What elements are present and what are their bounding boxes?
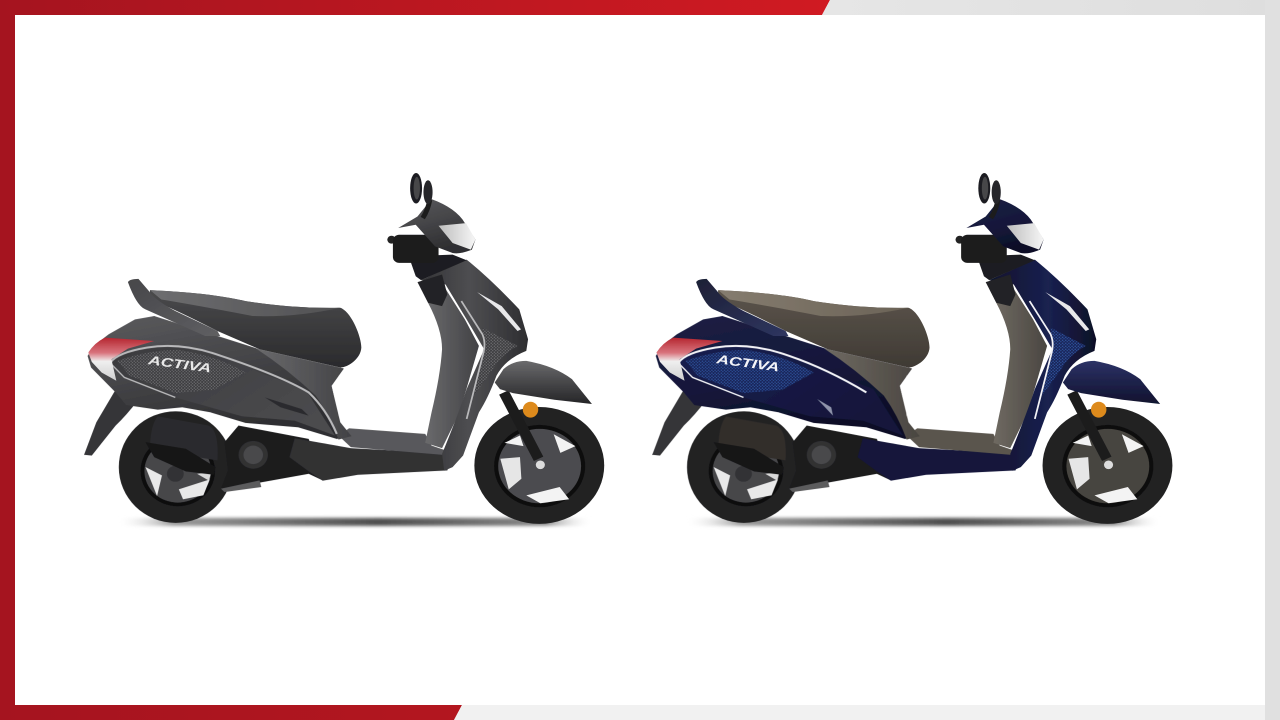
centre tunnel [256,349,352,440]
front fender [1063,361,1160,404]
shield dotted decal [474,328,518,396]
steering column [977,255,1035,280]
air filter box [150,416,218,460]
rear body panel [656,316,919,439]
shield dotted decal [1042,328,1086,396]
headlight cowl [966,199,1044,253]
floorboard [339,428,451,455]
key lock panel [986,275,1016,306]
frame: top red bar [0,0,830,15]
front fork [1072,392,1107,459]
white stripes on panel [679,346,866,397]
frame: bottom red bar [0,705,462,720]
air vent slot [817,399,833,416]
dotted decal texture [117,350,245,393]
exhaust arm [714,442,784,475]
seat [718,290,930,368]
front wheel [1043,407,1172,524]
centre tunnel [824,349,920,440]
underbody [289,438,453,481]
main stand and footrest [789,480,829,492]
leg shield inner [425,286,479,448]
air vent slot [265,397,309,416]
rear wheel [119,411,233,523]
shield light vent [1045,292,1089,331]
scooter: deep blue, right [652,173,1172,526]
air filter box [718,416,786,460]
main stand and footrest [221,480,261,492]
underbody [858,438,1021,481]
decal panel [679,345,903,436]
front fender [495,361,592,404]
tail lamp [88,338,154,381]
floorboard [907,428,1019,455]
exhaust arm [145,442,216,475]
grab rail [128,279,220,336]
model badge text: ACTIVA [714,351,780,374]
ground shadow [684,518,1161,526]
rear mudguard [652,391,707,455]
steering column [409,255,467,280]
frame: right grey bar [1265,0,1280,720]
leg shield inner [993,286,1047,448]
rear view mirrors [978,173,1001,218]
frame: top grey bar [822,0,1280,15]
grab rail [696,279,788,336]
headlight [439,223,475,250]
decal panel [110,345,335,436]
handlebar controls [387,235,439,263]
engine and pulley [789,426,891,489]
amber reflector [1091,402,1106,418]
leg shield front [989,260,1096,471]
scooter: matte grey, left [84,173,604,526]
dotted decal texture [686,350,814,393]
amber reflector [523,402,538,418]
rear wheel [687,411,801,523]
key lock panel [417,275,447,306]
silver stripes on panel [110,346,337,434]
shield light vent [477,292,521,331]
engine and pulley [221,426,323,489]
headlight cowl [398,199,475,253]
model badge text: ACTIVA [146,352,212,375]
tail lamp [656,338,722,381]
frame: left red bar [0,0,15,720]
ground shadow [116,518,593,526]
rear mudguard [84,391,138,455]
silver body line [461,301,484,419]
front fork [504,392,539,459]
rear body panel [88,316,351,439]
front wheel [474,407,604,524]
leg shield front [421,260,528,471]
handlebar controls [956,235,1007,263]
white body line [1030,301,1053,419]
frame: bottom light bar [454,705,1265,720]
headlight [1007,223,1044,250]
rear view mirrors [410,173,433,218]
seat [150,290,361,368]
